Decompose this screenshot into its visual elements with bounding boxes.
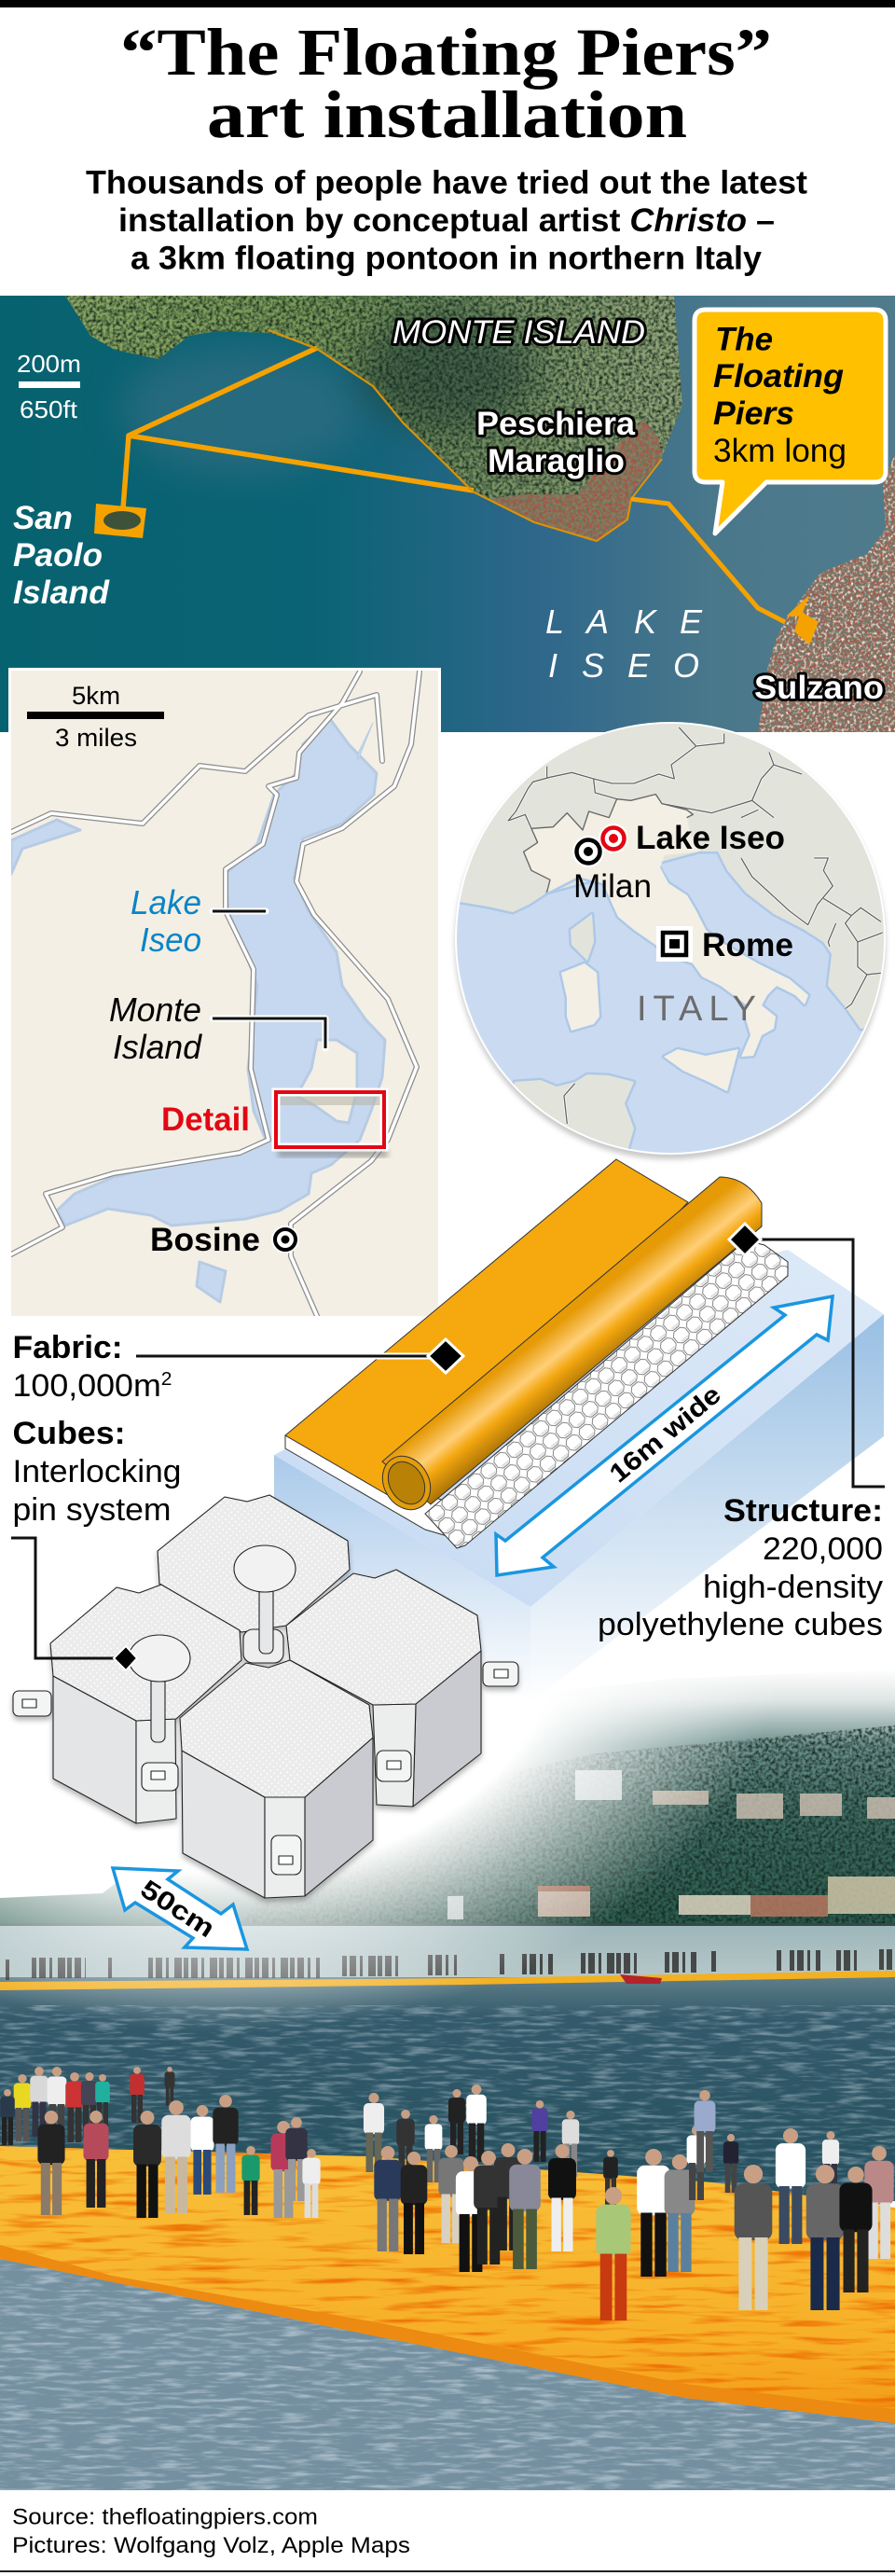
label: Monte Island with leader bbox=[109, 990, 325, 1066]
arrow: 16m wide bbox=[496, 1296, 833, 1575]
label: Monte Island with leader: Monte bbox=[109, 990, 201, 1029]
San Paolo Island marker bbox=[94, 504, 146, 538]
label: Cubes bbox=[11, 1416, 181, 1670]
scale bar bbox=[18, 354, 80, 418]
label: Structure bbox=[598, 1224, 885, 1642]
label: Lake Iseo bbox=[546, 610, 703, 677]
mid water bbox=[0, 1977, 895, 2201]
scale bar: 200m bbox=[17, 350, 81, 378]
Italy mainland and islands bbox=[547, 867, 808, 1091]
title bbox=[120, 15, 772, 152]
subtitle: Thousands of people have tried out the latest bbox=[86, 164, 807, 201]
arrow: 16m wide: 16m wide bbox=[604, 1379, 726, 1489]
Monte Island on lake map bbox=[296, 1040, 357, 1123]
source credits: Source: thefloatingpiers.com bbox=[12, 2505, 318, 2529]
pin: front bbox=[129, 1635, 190, 1742]
label: Structure: polyethylene cubes bbox=[598, 1607, 883, 1642]
marker and label: Milan: Milan bbox=[573, 868, 652, 905]
label: Bosine: Bosine bbox=[150, 1222, 260, 1258]
land: Monte Island bbox=[65, 296, 682, 541]
photo: people on the floating pier bbox=[0, 1669, 895, 2490]
label: Structure: 220,000 bbox=[763, 1531, 883, 1567]
label: San Paolo Island: Island bbox=[13, 575, 110, 611]
source credits bbox=[12, 2505, 410, 2558]
top rule bbox=[0, 0, 895, 7]
marker and label: Rome: Rome bbox=[702, 927, 793, 963]
right cube bbox=[286, 1570, 518, 1807]
subtitle bbox=[86, 164, 807, 276]
crowd bbox=[0, 2067, 894, 2320]
label: Monte Island with leader: Island bbox=[113, 1028, 202, 1066]
label: Lake Iseo with leader bbox=[131, 883, 266, 959]
panel: Italy globe bbox=[438, 709, 895, 1161]
label: Lake Iseo: K bbox=[634, 602, 658, 641]
label: Fabric: 100,000m bbox=[13, 1368, 154, 1404]
water slab bbox=[274, 1250, 884, 1702]
label: Lake Iseo: S bbox=[582, 646, 604, 685]
label: Monte Island: MONTE ISLAND bbox=[392, 314, 645, 351]
callout: The Floating Piers: 3km long bbox=[713, 433, 847, 469]
arrow: 50cm: 50cm bbox=[135, 1874, 220, 1943]
title: art installation bbox=[207, 77, 687, 152]
near water bbox=[0, 2238, 895, 2490]
scale: 5km / 3 miles bbox=[27, 682, 164, 752]
callout: The Floating Piers bbox=[695, 310, 886, 533]
panel: Lake Iseo locator map bbox=[8, 668, 441, 1321]
lake water bbox=[0, 296, 895, 732]
neighbouring land bbox=[460, 724, 884, 1149]
label: Lake Iseo: E bbox=[680, 602, 703, 641]
pier route bbox=[123, 330, 818, 644]
arrow: 50cm bbox=[113, 1868, 247, 1949]
label: Structure: Structure: bbox=[723, 1493, 883, 1529]
pin: back bbox=[234, 1545, 296, 1654]
title: “The Floating Piers” bbox=[120, 15, 772, 90]
bottom rule bbox=[0, 2570, 895, 2572]
label: San Paolo Island: Paolo bbox=[13, 537, 103, 574]
source credits: Pictures: Wolfgang Volz, Apple Maps bbox=[12, 2533, 410, 2558]
country borders bbox=[508, 727, 883, 1124]
label: Lake Iseo: E bbox=[627, 646, 651, 685]
hills and village bbox=[0, 1669, 895, 1926]
callout: The Floating Piers: Floating bbox=[713, 358, 844, 395]
label: Lake Iseo: L bbox=[545, 602, 564, 641]
callout: The Floating Piers: Piers bbox=[713, 395, 794, 432]
lake shape bbox=[11, 719, 385, 1302]
subtitle: installation by conceptual artist Christo – bbox=[118, 202, 775, 239]
label: Peschiera Maraglio: Maraglio bbox=[488, 443, 625, 479]
label: Peschiera Maraglio: Peschiera bbox=[476, 406, 636, 442]
front cube bbox=[180, 1660, 373, 1898]
label: Peschiera Maraglio bbox=[476, 406, 636, 479]
label: Italy: ITALY bbox=[637, 990, 756, 1029]
detail box: Detail bbox=[161, 1101, 250, 1138]
back pin socket bbox=[243, 1629, 283, 1663]
label: Lake Iseo: O bbox=[673, 646, 699, 685]
panel: satellite map bbox=[0, 296, 895, 732]
fabric sheet bbox=[285, 1159, 688, 1539]
marker and label: Rome bbox=[656, 926, 793, 963]
marker and label: Milan bbox=[572, 836, 652, 905]
left cube bbox=[13, 1585, 241, 1823]
label: San Paolo Island bbox=[13, 506, 110, 604]
label: Structure: high-density bbox=[703, 1570, 883, 1605]
fabric roll bbox=[373, 1177, 762, 1518]
label: Cubes: Interlocking bbox=[13, 1454, 181, 1489]
land: Sulzano shore bbox=[758, 454, 895, 732]
subtitle: a 3km floating pontoon in northern Italy bbox=[131, 241, 763, 276]
near pier fabric bbox=[0, 2146, 895, 2423]
label: Cubes: pin system bbox=[13, 1492, 172, 1528]
white fade over photo bbox=[0, 1623, 895, 2033]
cubes: interlocking pontoon units bbox=[13, 1495, 518, 1898]
back cube bbox=[158, 1495, 350, 1632]
scale: 5km / 3 miles: 5km bbox=[72, 682, 120, 710]
label: Sulzano: Sulzano bbox=[754, 670, 884, 706]
label: Fabric bbox=[13, 1330, 463, 1404]
cubes beneath the fabric bbox=[425, 1240, 788, 1548]
label: Lake Iseo: A bbox=[585, 602, 609, 641]
marker and label: Lake Iseo: Lake Iseo bbox=[636, 820, 785, 856]
scale: 5km / 3 miles: 3 miles bbox=[55, 724, 137, 752]
label: Lake Iseo: I bbox=[548, 646, 558, 685]
label: Cubes: Cubes: bbox=[13, 1416, 125, 1451]
footer panel bbox=[0, 2490, 895, 2576]
roads bbox=[11, 672, 420, 1316]
scale bar: 650ft bbox=[20, 395, 78, 423]
label: San Paolo Island: San bbox=[13, 500, 73, 536]
detail box bbox=[161, 1092, 388, 1157]
callout: The Floating Piers: The bbox=[715, 321, 773, 358]
label: Fabric: Fabric: bbox=[13, 1330, 123, 1365]
connector tabs bbox=[142, 1751, 411, 1875]
far pier with people bbox=[0, 1960, 895, 1990]
label: Lake Iseo with leader: Iseo bbox=[140, 921, 201, 959]
panel: structure diagram bbox=[11, 1159, 885, 1949]
label: Lake Iseo with leader: Lake bbox=[131, 883, 201, 921]
label: Fabric: 2 bbox=[161, 1369, 172, 1390]
far water bbox=[0, 1926, 895, 1980]
